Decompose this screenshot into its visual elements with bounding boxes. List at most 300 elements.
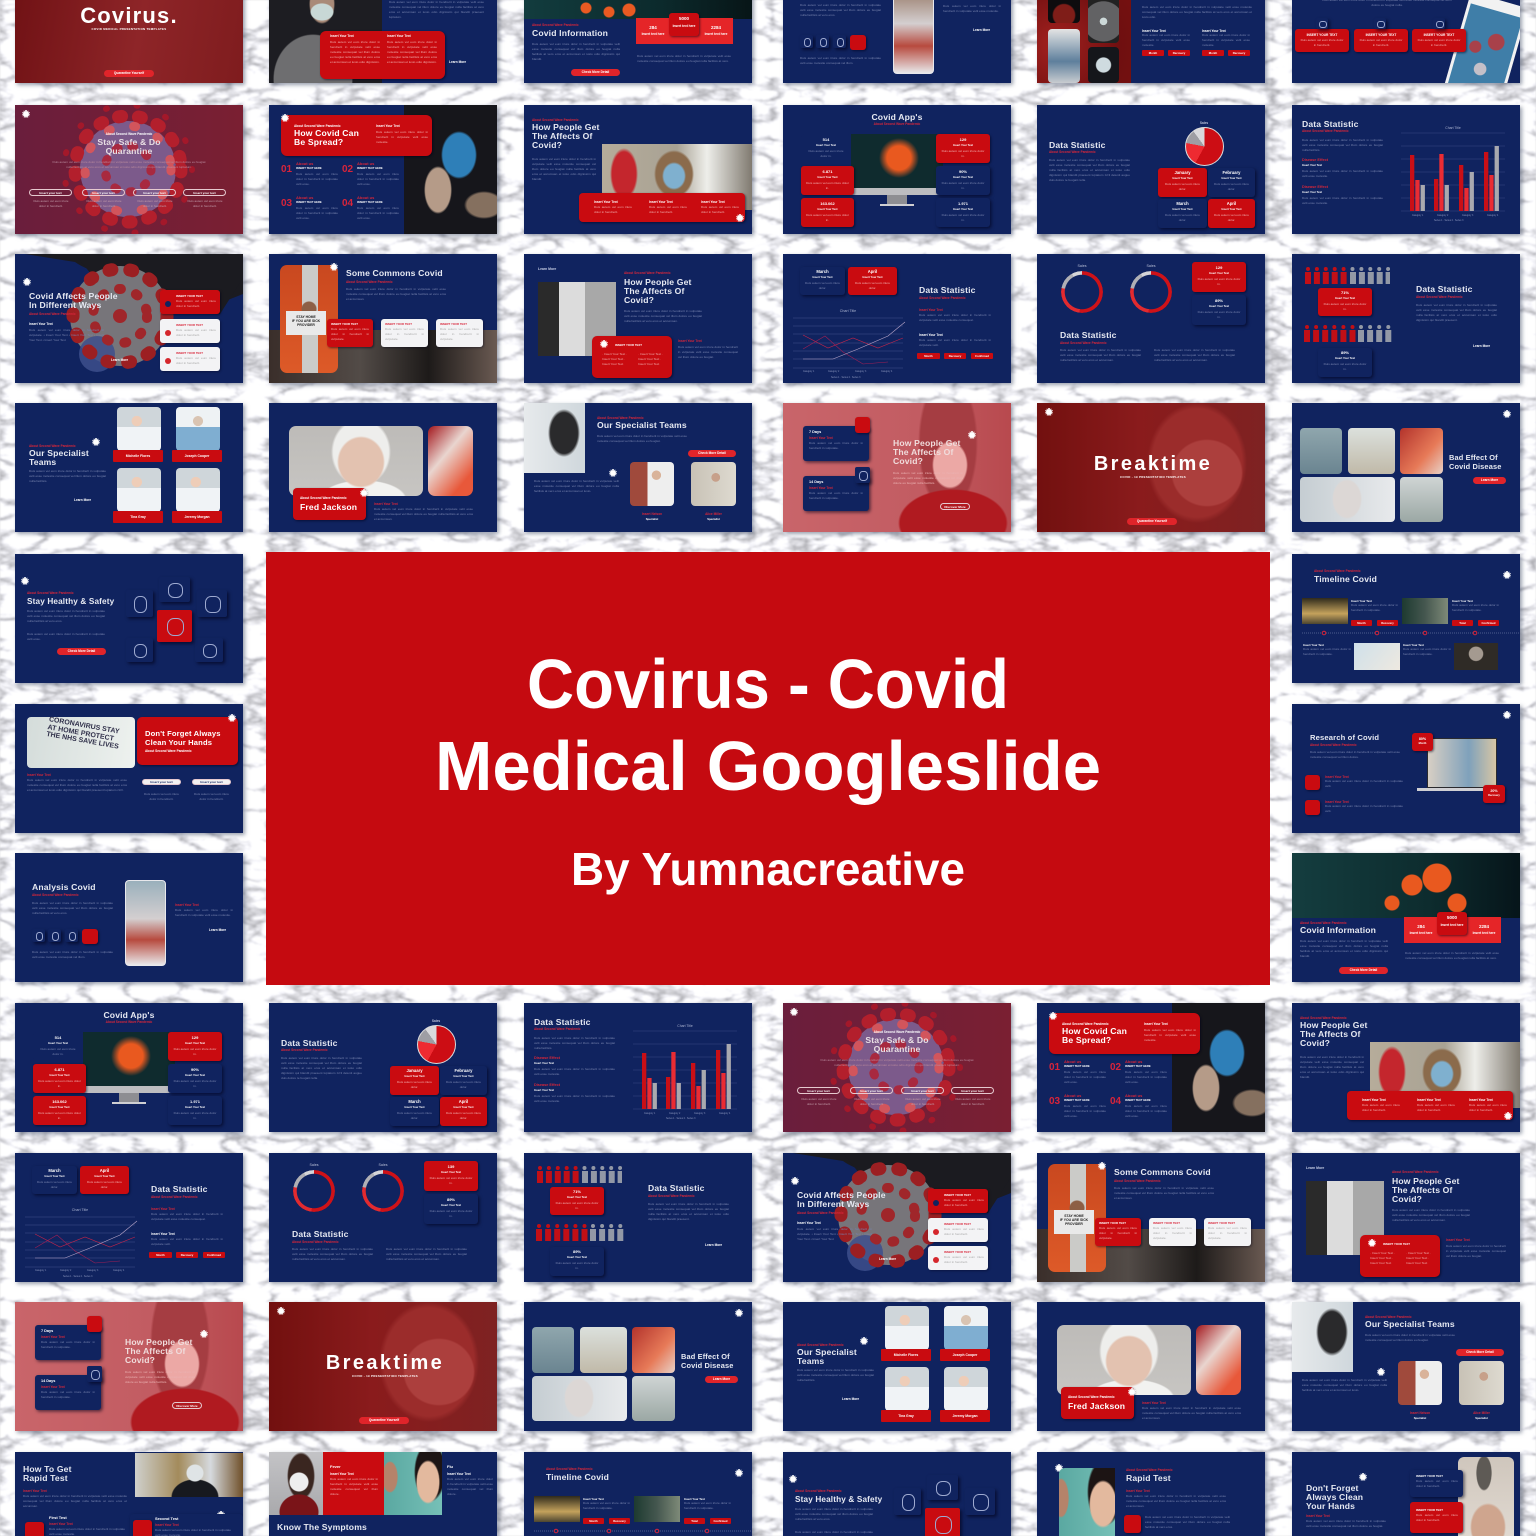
January xyxy=(1158,168,1207,197)
red checklist bar: Insert Your Text xyxy=(1469,1098,1493,1102)
title: Quarantine xyxy=(106,146,152,156)
line chart: Category 2 xyxy=(60,1269,72,1272)
virus illustration xyxy=(62,105,195,234)
title xyxy=(797,1348,857,1366)
section 1: Duis autem vel eum iriure dolor in hendrerit in vulputate velit esse molestie. xyxy=(1302,169,1383,178)
stat right 2: Duis autem vel eum iriure dolor in. xyxy=(174,1079,216,1088)
button: Check More Detail xyxy=(698,451,726,455)
title: Covid App's xyxy=(871,112,923,122)
team member 2: Joseph Cooper xyxy=(953,1353,977,1357)
right text: Duis autem vel eum iriure dolor in hendrerit in vulputate velit esse molestie consequat vel illum dolore eu feugiat nulla facilisis at vero. xyxy=(637,54,731,63)
line chart: Series 1 · Series 2 · Series 3 xyxy=(63,1275,93,1278)
body text: Duis autem vel eum iriure dolor in hendrerit in vulputate velit esse molestie consequat vel illum dolore eu feugiat nulla facilisis. xyxy=(125,1370,195,1384)
navy card xyxy=(1410,1470,1463,1497)
photo: sanitizer xyxy=(1172,1003,1265,1132)
title: How To Get xyxy=(23,1464,72,1474)
red checklist bar: Insert Your Text xyxy=(594,200,618,204)
step 04: Duis autem vel eum iriure dolor in hendrerit in vulputate velit esse. xyxy=(1125,1104,1167,1118)
bar chart: Category 1 xyxy=(644,1112,656,1115)
column 2: Insert Your Text xyxy=(1202,29,1226,33)
photo row top: Insert Your Text xyxy=(1452,599,1473,603)
learn more: Learn More xyxy=(1306,1166,1324,1170)
body text: Duis autem vel eum iriure dolor in hendrerit in vulputate velit esse molestie consequat vel illum dolore eu feugiat nulla facilisis at vero eros et accumsan et iusto odio. xyxy=(1142,5,1252,19)
stat right 3 xyxy=(168,1096,222,1125)
photo row top: Insert Your Text xyxy=(583,1497,604,1501)
line chart xyxy=(793,309,906,379)
February: Insert Your Text xyxy=(453,1075,474,1078)
title xyxy=(624,277,692,305)
side text: Duis autem vel eum iriure dolor in hendrerit in vulputate velit esse molestie consequat vel illum dolore eu feugiat nulla facilisis at vero eros et accumsan et iusto. xyxy=(1302,1378,1387,1392)
stat left 1: 514 xyxy=(55,1035,61,1040)
red header: Be Spread? xyxy=(294,137,343,147)
button xyxy=(688,450,736,457)
title xyxy=(1306,1484,1363,1512)
step 04: About us xyxy=(1125,1093,1142,1098)
photo: hospital xyxy=(1370,1042,1520,1108)
stat left 2: 6.871 xyxy=(822,169,832,174)
photo: woman in mask xyxy=(269,0,382,83)
photo: man with sign xyxy=(1048,1164,1106,1272)
white item 2: Duis autem vel eum iriure dolor in hendrerit. xyxy=(176,356,216,365)
column 2: Duis autem vel eum iriure dolor in hendrerit in vulputate velit esse molestie. xyxy=(1202,33,1250,47)
bar chart xyxy=(624,1018,744,1126)
line chart: Series 1 · Series 2 · Series 3 xyxy=(831,376,861,379)
stat band: 284 xyxy=(649,25,657,30)
logo virus xyxy=(282,115,288,121)
card 14 days: Insert Your Text xyxy=(809,486,833,490)
title: Data Statistic xyxy=(648,1183,705,1193)
stat left 3: Duis autem vel eum iriure dolor in. xyxy=(806,213,849,222)
stat left 2: Insert Your Text xyxy=(817,176,838,179)
pill buttons: Duis autem vel eum iriure dolor in hendrerit. xyxy=(187,199,223,208)
body text 3: Insert Your Text xyxy=(151,1232,175,1236)
button xyxy=(705,1376,738,1383)
stat band xyxy=(1404,917,1501,943)
name card xyxy=(293,488,366,520)
April: Insert Your Text xyxy=(862,276,882,279)
February: Insert Your Text xyxy=(1221,177,1242,180)
red item: INSERT YOUR TEXT xyxy=(176,294,203,298)
label: Insert Your Text xyxy=(23,1489,47,1493)
step 01: Duis autem vel eum iriure dolor in hendrerit in vulputate velit esse. xyxy=(296,172,338,186)
logo virus xyxy=(1504,411,1510,417)
71 percent card: 71% xyxy=(573,1189,581,1194)
tags xyxy=(149,1252,227,1259)
icon grid xyxy=(894,1475,995,1536)
February: Duis autem vel eum iriure dolor. xyxy=(446,1080,481,1089)
January xyxy=(390,1066,439,1095)
person 1 xyxy=(630,462,674,521)
card 7 days: Duis autem vel eum iriure dolor in hendrerit in vulputate. xyxy=(809,441,863,450)
photo: man in mask xyxy=(135,1453,243,1497)
title: How People Get xyxy=(1392,1176,1460,1186)
subtitle: About Second Wave Pandemic xyxy=(106,132,152,136)
photo: man with sign xyxy=(280,265,338,373)
card 3: INSERT YOUR TEXT xyxy=(1424,33,1454,37)
slide: How People Get pink bottom xyxy=(15,1302,243,1431)
stat right 3: Duis autem vel eum iriure dolor in. xyxy=(942,213,984,222)
learn more: Learn More xyxy=(842,1397,859,1401)
logo virus xyxy=(93,439,99,445)
title: Bad Effect Of xyxy=(1449,453,1498,462)
team member 4: Jeremy Morgan xyxy=(952,1414,978,1418)
body text: Duis autem vel eum iriure dolor in hendrerit in vulputate velit esse molestie consequat vel illum dolore eu feugiat nulla facilisis at vero eros et accumsan et iusto odio dignissim qui blandit praesent luptatum zzril delenit augue duis dolore te feugait nulla. xyxy=(1049,158,1130,182)
April: Duis autem vel eum iriure dolor. xyxy=(446,1111,481,1120)
button: Check More Detail xyxy=(1466,1350,1494,1354)
89 percent card: 89% xyxy=(1341,350,1349,355)
step 01: 01 xyxy=(281,164,292,175)
red panel fever xyxy=(323,1452,384,1515)
team member 2: Joseph Cooper xyxy=(185,454,209,458)
red card xyxy=(1410,1502,1463,1533)
step 02: Duis autem vel eum iriure dolor in hendrerit in vulputate velit esse. xyxy=(1125,1070,1167,1084)
step 03 xyxy=(281,195,338,220)
stat right 3: Insert Your Text xyxy=(185,1106,205,1109)
column 2 xyxy=(1202,29,1250,56)
team member 2 xyxy=(940,1306,992,1362)
person 1: Insert Nelson xyxy=(1410,1411,1430,1415)
photo row top: Duis autem vel eum iriure dolor in hendrerit in vulputate. xyxy=(1452,603,1499,612)
body right: Duis autem vel eum iriure dolor in hendrerit in vulputate velit esse molestie consequat vel illum dolore eu feugiat nulla facilisis at vero eros et accumsan. xyxy=(1154,348,1235,362)
protest sign: STAY HOME xyxy=(1064,1214,1084,1218)
title: Data Statistic xyxy=(151,1184,208,1194)
title: Some Commons Covid xyxy=(346,268,443,278)
title: Rapid Test xyxy=(23,1473,68,1483)
step 03 xyxy=(1049,1094,1109,1124)
name card: Fred Jackson xyxy=(1068,1401,1125,1411)
slide: phones gallery xyxy=(1037,0,1265,83)
pill buttons: Duis autem vel eum iriure dolor in hendrerit. xyxy=(955,1097,991,1106)
red item: Duis autem vel eum iriure dolor in hendrerit. xyxy=(176,299,216,308)
label: Insert Your Text xyxy=(1306,1514,1330,1518)
89 percent card: 89% xyxy=(573,1249,581,1254)
subtitle: About Second Wave Pandemic xyxy=(1392,1170,1439,1174)
title: Stay Healthy & Safety xyxy=(795,1495,882,1504)
protest sign: IF YOU ARE SICK xyxy=(1060,1218,1088,1222)
April: Duis autem vel eum iriure dolor. xyxy=(1214,213,1249,222)
icon red xyxy=(87,1316,102,1332)
red header: Duis autem vel eum iriure dolor in hendrerit in vulputate velit esse molestie. xyxy=(1144,1028,1196,1042)
photo row top xyxy=(534,1496,734,1525)
title: Stay Safe & Do xyxy=(97,137,161,147)
red header: About Second Wave Pandemic xyxy=(1062,1022,1109,1026)
photo row top: Insert Your Text xyxy=(684,1497,705,1501)
red callout: Duis autem vel eum iriure dolor in hendrerit in vulputate velit esse molestie consequat vel illum dolore eu feugiat nulla facilisis at vero eros et accumsan et iusto odio dignissim. xyxy=(330,40,380,64)
stat 80 xyxy=(1412,733,1433,751)
body text: Duis autem vel eum iriure dolor in hendrerit in vulputate velit esse molestie consequat vel illum dolore eu feugiat nulla facilisis at vero eros. xyxy=(27,609,105,623)
white card 1: Duis autem vel eum iriure dolor in hendrerit in vulputate. xyxy=(385,327,424,341)
logo virus xyxy=(792,1178,798,1184)
step 02 xyxy=(1110,1060,1170,1090)
stat card navy: Insert Your Text xyxy=(1209,305,1229,308)
title: Rapid Test xyxy=(1126,1473,1171,1483)
April xyxy=(848,267,897,295)
team member 4 xyxy=(172,468,222,523)
red card xyxy=(1360,1235,1440,1277)
body text: Duis autem vel eum iriure dolor in hendrerit in vulputate velit esse molestie consequat vel illum dolore eu feugiat nulla facilisis. xyxy=(797,1368,874,1382)
March: March xyxy=(408,1099,421,1104)
slide: Some Commons Covid xyxy=(269,254,497,383)
April: Insert Your Text xyxy=(453,1106,474,1109)
stat right 2: Insert Your Text xyxy=(953,176,973,179)
tags: Confirmed xyxy=(975,354,989,358)
card 1: INSERT YOUR TEXT xyxy=(1307,33,1337,37)
March xyxy=(32,1166,77,1194)
stat left 1: 514 xyxy=(823,137,829,142)
photo row top: Month xyxy=(589,1519,598,1523)
slide: Our Specialist Teams 2 bottom xyxy=(1292,1302,1520,1431)
subtitle: About Second Wave Pandemic xyxy=(1416,295,1463,299)
pill buttons: Duis autem vel eum iriure dolor in hendrerit. xyxy=(137,199,173,208)
71 percent card xyxy=(550,1187,604,1215)
pill buttons: Duis autem vel eum iriure dolor in hendrerit. xyxy=(33,199,69,208)
red card: · Insert Your Text · Insert Your Text · Insert Your Text xyxy=(1370,1251,1395,1265)
red photo panel xyxy=(1037,0,1131,83)
April xyxy=(80,1166,129,1194)
stat right 1: 129 xyxy=(960,137,966,142)
March: Insert Your Text xyxy=(1172,208,1192,211)
title: The Affects Of xyxy=(1392,1185,1453,1195)
title: How People Get xyxy=(1300,1020,1368,1030)
tags: Month xyxy=(924,354,933,358)
title xyxy=(29,291,118,310)
title: Covid? xyxy=(1392,1194,1422,1204)
title xyxy=(29,448,89,467)
logo virus xyxy=(1050,1013,1056,1019)
flu column xyxy=(442,1452,497,1515)
right text: Duis autem vel eum iriure dolor in hendrerit in vulputate velit esse molestie consequat vel illum dolore eu feugiat nulla facilisis at vero. xyxy=(1405,951,1499,960)
subtitle: About Second Wave Pandemic xyxy=(797,1211,844,1215)
photo: sign: CORONAVIRUS STAY AT HOME PROTECT THE NHS SAVE LIVES xyxy=(46,716,120,751)
button xyxy=(172,1402,202,1409)
title: Know The Symptoms xyxy=(277,1522,367,1532)
flu column: Insert Your Text xyxy=(447,1472,471,1476)
slide: Stay Safe bottom xyxy=(783,1003,1011,1132)
title: Covid Information xyxy=(532,28,608,38)
learn more: Learn More xyxy=(111,358,128,362)
protest sign xyxy=(286,311,326,335)
team member 3: Tina Gray xyxy=(130,515,146,519)
card 14 days xyxy=(803,476,869,511)
subtitle: About Second Wave Pandemic xyxy=(546,1467,593,1471)
section 1: Disease Effect xyxy=(534,1056,560,1060)
stat left 2: Duis autem vel eum iriure dolor in. xyxy=(806,181,849,190)
red checklist bar: Duis autem vel eum iriure dolor in hendrerit. xyxy=(1417,1103,1455,1112)
logo virus xyxy=(736,1470,742,1476)
stat band: Insert text here xyxy=(1473,931,1495,935)
step 02: 02 xyxy=(1110,1062,1121,1073)
logo virus xyxy=(218,1512,224,1518)
body text: Duis autem vel eum iriure dolor in hendrerit in vulputate velit esse molestie consequat vel illum dolore eu feugiat nulla facilisis at vero eros et accumsan et iusto odio dignissim qui blandit praesent. xyxy=(1416,303,1497,322)
stat right 2 xyxy=(168,1064,222,1093)
card 7 days: Duis autem vel eum iriure dolor in hendrerit in vulputate. xyxy=(41,1340,95,1349)
February: February xyxy=(455,1068,472,1073)
card 3 xyxy=(1412,29,1466,52)
stat card red: Duis autem vel eum iriure dolor in. xyxy=(1198,277,1240,286)
donut 2 xyxy=(362,1163,404,1212)
photo: sign xyxy=(27,717,135,768)
red panel fever: Fever xyxy=(330,1464,341,1469)
phone xyxy=(893,0,934,74)
body text 2: Duis autem vel eum iriure dolor in hendrerit in vulputate velit esse molestie consequat vel illum. xyxy=(32,950,113,959)
red item: INSERT YOUR TEXT xyxy=(944,1193,971,1197)
item text: Duis autem vel eum iriure dolor in hendrerit in vulputate velit esse molestie consequat vel illum dolore eu feugiat nulla facilisis at vero eros. xyxy=(1145,1515,1230,1529)
red header: Insert Your Text xyxy=(1144,1022,1168,1026)
red item xyxy=(160,290,220,314)
title: Data Statistic xyxy=(534,1017,591,1027)
donut 1 xyxy=(1061,264,1103,313)
February: Duis autem vel eum iriure dolor. xyxy=(1214,182,1249,191)
January: Insert Your Text xyxy=(404,1075,424,1078)
card 2: INSERT YOUR TEXT xyxy=(1366,33,1396,37)
slide: Data Statistic people xyxy=(1292,254,1520,383)
slide: Covid Apps monitor xyxy=(783,105,1011,234)
bar chart: Category 1 xyxy=(1412,214,1424,217)
bar chart: Chart Title xyxy=(677,1024,693,1028)
button xyxy=(1339,967,1388,974)
slide: Data Statistic line bottom xyxy=(15,1153,243,1282)
title xyxy=(893,438,961,466)
subtitle: About Second Wave Pandemic xyxy=(624,271,671,275)
step 01: 01 xyxy=(1049,1062,1060,1073)
photo: lab xyxy=(428,426,473,496)
white item 1: INSERT YOUR TEXT xyxy=(176,323,203,327)
step 04: About us xyxy=(357,195,374,200)
name card: About Second Wave Pandemic xyxy=(300,496,347,500)
body text 4: Duis autem vel eum iriure dolor in hendrerit in vulputate velit. xyxy=(919,338,991,347)
71 percent card: Duis autem vel eum iriure dolor in. xyxy=(1324,302,1366,311)
step 01: About us xyxy=(296,161,313,166)
stat right 1: Duis autem vel eum iriure dolor in. xyxy=(174,1047,216,1056)
virus logo xyxy=(1099,1163,1105,1169)
stat 20: Recovery xyxy=(1488,794,1500,797)
red callout: Insert Your Text xyxy=(387,34,411,38)
button: Check More Detail xyxy=(1350,968,1377,972)
learn more: Learn More xyxy=(538,267,556,271)
red card: · Insert Your Text · Insert Your Text · Insert Your Text xyxy=(602,352,627,366)
team member 1 xyxy=(881,1306,933,1362)
monitor xyxy=(851,134,943,206)
stat right 2: Insert Your Text xyxy=(185,1074,205,1077)
center title panel: Covirus - Covid xyxy=(527,645,1009,723)
bar chart: Category 2 xyxy=(669,1112,681,1115)
team member 3 xyxy=(881,1367,933,1423)
title: Data Statistic xyxy=(1302,119,1359,129)
item 2: Duis autem vel eum iriure dolor in hendrerit in vulputate velit. xyxy=(1325,804,1403,813)
button: Learn More xyxy=(973,28,990,32)
stat card red: Duis autem vel eum iriure dolor in. xyxy=(430,1176,472,1185)
body text: Insert Your Text xyxy=(151,1207,175,1211)
body text: Duis autem vel eum iriure dolor in hendrerit in vulputate velit esse molestie consequat vel illum dolore eu feugiat nulla facilisis. xyxy=(1302,138,1383,152)
tags: Confirmed xyxy=(207,1253,221,1257)
red card: Duis autem vel eum iriure dolor in hendrerit. xyxy=(1416,1513,1458,1522)
title: Breaktime xyxy=(1094,453,1212,475)
March: Duis autem vel eum iriure dolor. xyxy=(37,1180,72,1189)
stat right 1: Insert Your Text xyxy=(185,1042,205,1045)
white item 2 xyxy=(160,347,220,371)
first test xyxy=(25,1516,125,1536)
red card: INSERT YOUR TEXT xyxy=(1099,1221,1126,1225)
slide: Data Statistic bars xyxy=(1292,105,1520,234)
stat band xyxy=(636,18,733,44)
white card 2: Duis autem vel eum iriure dolor in hendrerit in vulputate. xyxy=(440,327,479,341)
February xyxy=(440,1066,487,1095)
line chart xyxy=(20,1203,142,1279)
step 04: INSERT TEXT HERE xyxy=(357,201,383,204)
step 01 xyxy=(1049,1060,1109,1090)
people row 2 xyxy=(534,1223,624,1243)
white card 2 xyxy=(436,319,483,347)
slide: mask woman xyxy=(269,0,497,83)
button: Quarantine Yourself xyxy=(369,1418,399,1422)
button: Learn More xyxy=(713,1377,730,1381)
white card 1: Duis autem vel eum iriure dolor in hendrerit in vulputate. xyxy=(1153,1226,1192,1240)
slide: Bad Effect xyxy=(1292,403,1520,532)
stat card navy xyxy=(424,1194,478,1224)
stat left 3 xyxy=(33,1096,86,1125)
stat right 1: 129 xyxy=(192,1035,198,1040)
body text 2: Duis autem vel eum iriure dolor in hendrerit in vulputate. • Insert Your Text • Insert Your Text • Insert Your Text • Insert Your Text xyxy=(29,328,104,342)
slide: tilted phone xyxy=(1292,0,1520,83)
stat band: 2284 xyxy=(711,25,721,30)
body text: Duis autem vel eum iriure dolor in hendrerit in vulputate velit esse molestie consequat vel illum dolore eu feugiat nulla facilisis at vero eros et accumsan et iusto odio dignissim qui blandit. xyxy=(1300,1055,1364,1079)
stat right 1: Duis autem vel eum iriure dolor in. xyxy=(942,149,984,158)
team member 3 xyxy=(113,468,163,523)
stat left 1 xyxy=(801,134,851,163)
stat right 3 xyxy=(936,198,990,227)
protest sign: PROVIDER xyxy=(1065,1222,1083,1226)
title: Breaktime xyxy=(326,1352,444,1374)
logo virus xyxy=(361,490,367,496)
89 percent card: Insert Your Text xyxy=(1335,357,1355,360)
stat right 2 xyxy=(936,166,990,195)
subtitle: About Second Wave Pandemic xyxy=(292,1240,339,1244)
title: Data Statistic xyxy=(1049,140,1106,150)
donut 2: Sales xyxy=(1146,264,1156,268)
stat left 2: Insert Your Text xyxy=(49,1074,70,1077)
title: Timeline Covid xyxy=(1314,574,1377,584)
title: Covid? xyxy=(624,295,654,305)
learn more: Learn More xyxy=(1473,344,1490,348)
body text 2: Duis autem vel eum iriure dolor in hendrerit in vulputate. • Insert Your Text • Insert Your Text • Insert Your Text • Insert Your Text xyxy=(797,1227,872,1241)
photo: microscope xyxy=(524,403,585,473)
subtitle: About Second Wave Pandemic xyxy=(281,1048,328,1052)
photo: nasal test xyxy=(384,1452,442,1515)
team member 3: Tina Gray xyxy=(898,1414,914,1418)
January: Duis autem vel eum iriure dolor. xyxy=(397,1080,432,1089)
learn more link: Learn More xyxy=(449,60,466,64)
slide: How People Get hospital bottom xyxy=(1292,1003,1520,1132)
first test: Duis autem vel eum iriure dolor in hendrerit in vulputate velit esse molestie. xyxy=(49,1527,125,1536)
title: Covid? xyxy=(1300,1038,1330,1048)
stat highlight: 5000 xyxy=(679,16,689,21)
step 01: About us xyxy=(1064,1059,1081,1064)
people row 2 xyxy=(1304,325,1392,342)
title: In Different Ways xyxy=(797,1199,869,1209)
protest sign: STAY HOME xyxy=(296,315,316,319)
slide: Fred Jackson xyxy=(269,403,497,532)
step 02: 02 xyxy=(342,164,353,175)
logo virus xyxy=(1056,1465,1062,1471)
body text 2: Duis autem vel eum iriure dolor in hendrerit in vulputate velit esse molestie consequat vel illum. xyxy=(800,56,881,65)
card 2 xyxy=(1354,29,1408,52)
second test: Insert Your Text xyxy=(155,1523,179,1527)
column 2: Month xyxy=(1209,51,1217,55)
red card xyxy=(592,336,672,378)
stat band: Insert text here xyxy=(705,32,727,36)
stat 80: Month xyxy=(1419,742,1426,745)
stat card red: 129 xyxy=(1216,265,1222,270)
